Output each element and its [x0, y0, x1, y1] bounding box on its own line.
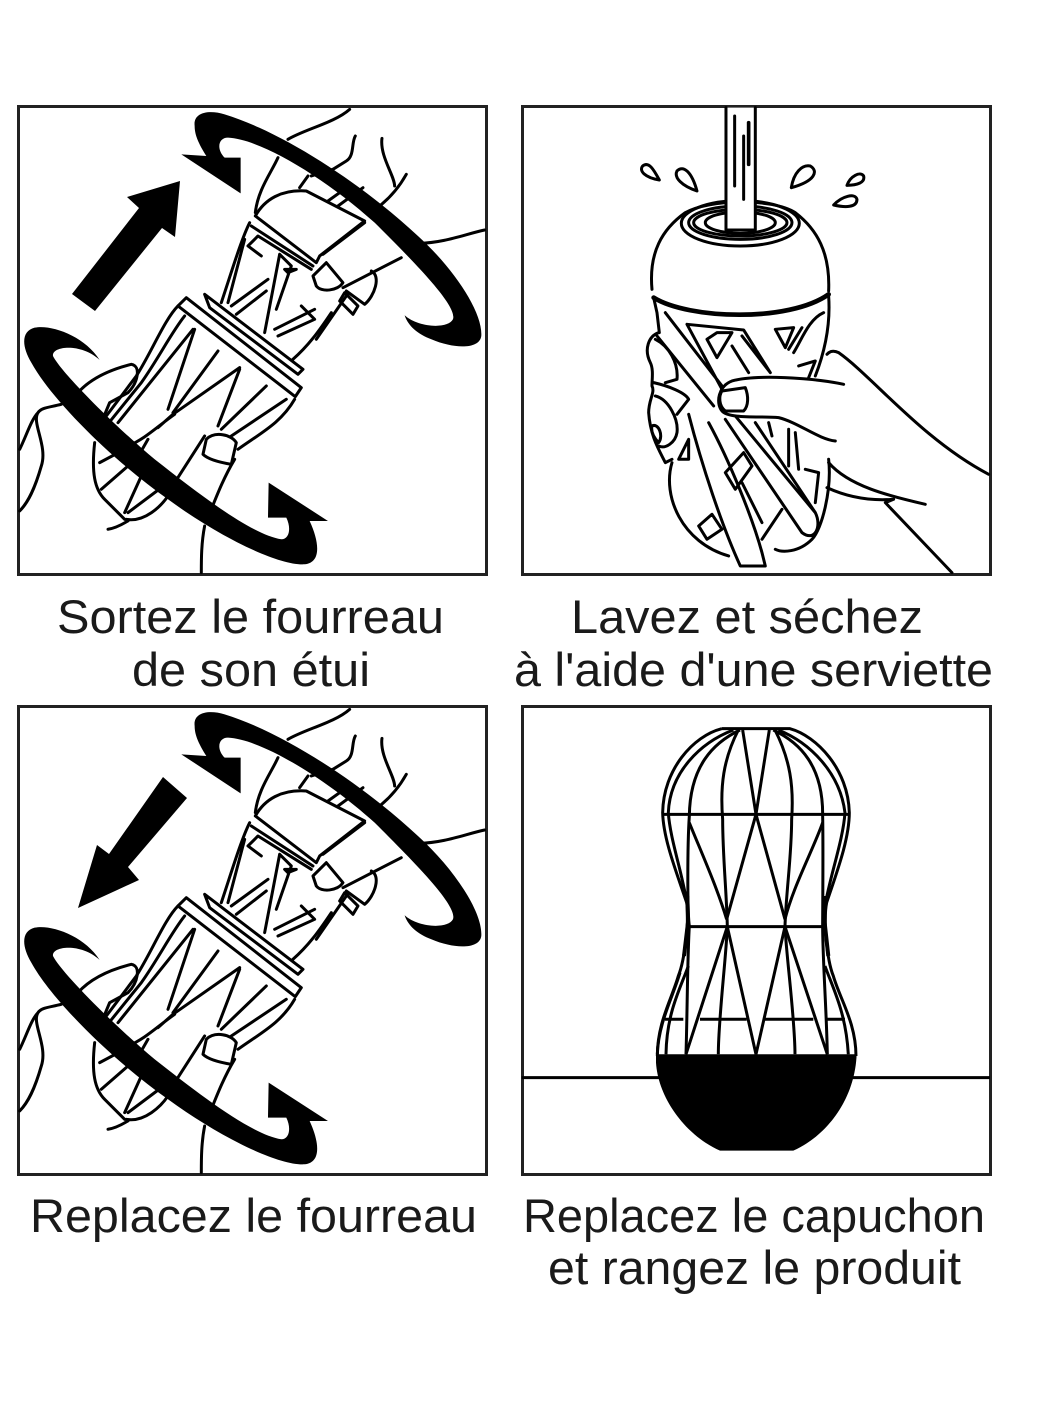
caption: sortez: Sortez le fourreau [57, 590, 444, 643]
illustration: hands twisting sleeve [20, 109, 485, 573]
panel: replace cap [522, 706, 990, 1174]
arrow: push down [78, 777, 187, 908]
caption: replacez capuchon [523, 1189, 985, 1294]
illustration: hands twisting sleeve back [20, 709, 485, 1173]
caption: lavez [514, 590, 993, 696]
caption: sortez [57, 590, 444, 696]
illustration: washing under water [642, 108, 989, 573]
panel: replace sleeve [18, 706, 486, 1174]
caption: replacez capuchon: et rangez le produit [548, 1241, 961, 1294]
caption: lavez: Lavez et séchez [571, 590, 923, 643]
caption: replacez fourreau: Replacez le fourreau [30, 1189, 477, 1242]
arrow: pull up [72, 181, 180, 311]
caption: lavez: à l'aide d'une serviette [514, 643, 993, 696]
caption: replacez capuchon: Replacez le capuchon [523, 1189, 985, 1242]
illustration: product standing [522, 729, 990, 1151]
panel: remove sleeve [18, 106, 486, 574]
caption: sortez: de son étui [132, 643, 370, 696]
panel: wash and dry [522, 106, 990, 574]
